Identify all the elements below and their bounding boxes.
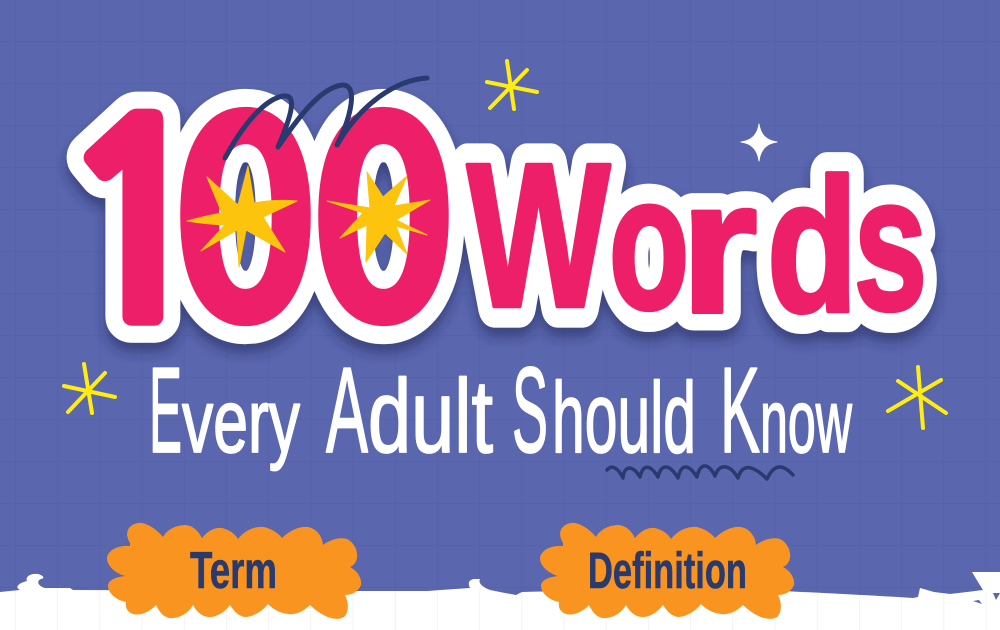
title outline: d [767, 140, 858, 352]
icon: wavy underline [607, 466, 793, 479]
subtitle: hould [552, 362, 696, 474]
subtitle: E [149, 342, 182, 478]
icon: yellow asterisk top [487, 61, 537, 109]
subtitle: dult [368, 359, 493, 475]
title outline [55, 0, 927, 403]
title outline: W [467, 122, 611, 350]
subtitle: very [182, 372, 300, 472]
subtitle: S [512, 342, 548, 478]
badge: Term: Term [190, 542, 277, 600]
icon: star in second zero [327, 172, 430, 262]
title: 100 Words: d [767, 140, 858, 352]
title: 100 Words: o [609, 136, 689, 349]
icon: yellow asterisk right [888, 367, 946, 428]
badge: Definition [540, 523, 794, 619]
title outline: 1 [55, 93, 219, 360]
title: 100 Words: W [467, 122, 611, 350]
badge: Definition: Definition [588, 542, 747, 599]
icon: scribble over zeros [225, 78, 427, 158]
title: 100 Words: r [680, 141, 758, 353]
subtitle: K [720, 342, 760, 478]
title outline: s [854, 137, 927, 350]
torn white paper edge [0, 572, 1000, 630]
subtitle [149, 342, 853, 478]
title outline: o [609, 136, 689, 349]
title: 100 Words: 1 [55, 93, 219, 360]
title: 100 Words: s [854, 137, 927, 350]
subtitle: A [326, 342, 368, 478]
badge: Term [107, 523, 361, 619]
icon: star in first zero [187, 166, 297, 267]
title: 100 Words [55, 0, 927, 403]
icon: white sparkle [741, 124, 777, 161]
title outline: r [680, 141, 758, 353]
subtitle: now [760, 372, 853, 472]
icon: yellow asterisk left [64, 364, 115, 413]
